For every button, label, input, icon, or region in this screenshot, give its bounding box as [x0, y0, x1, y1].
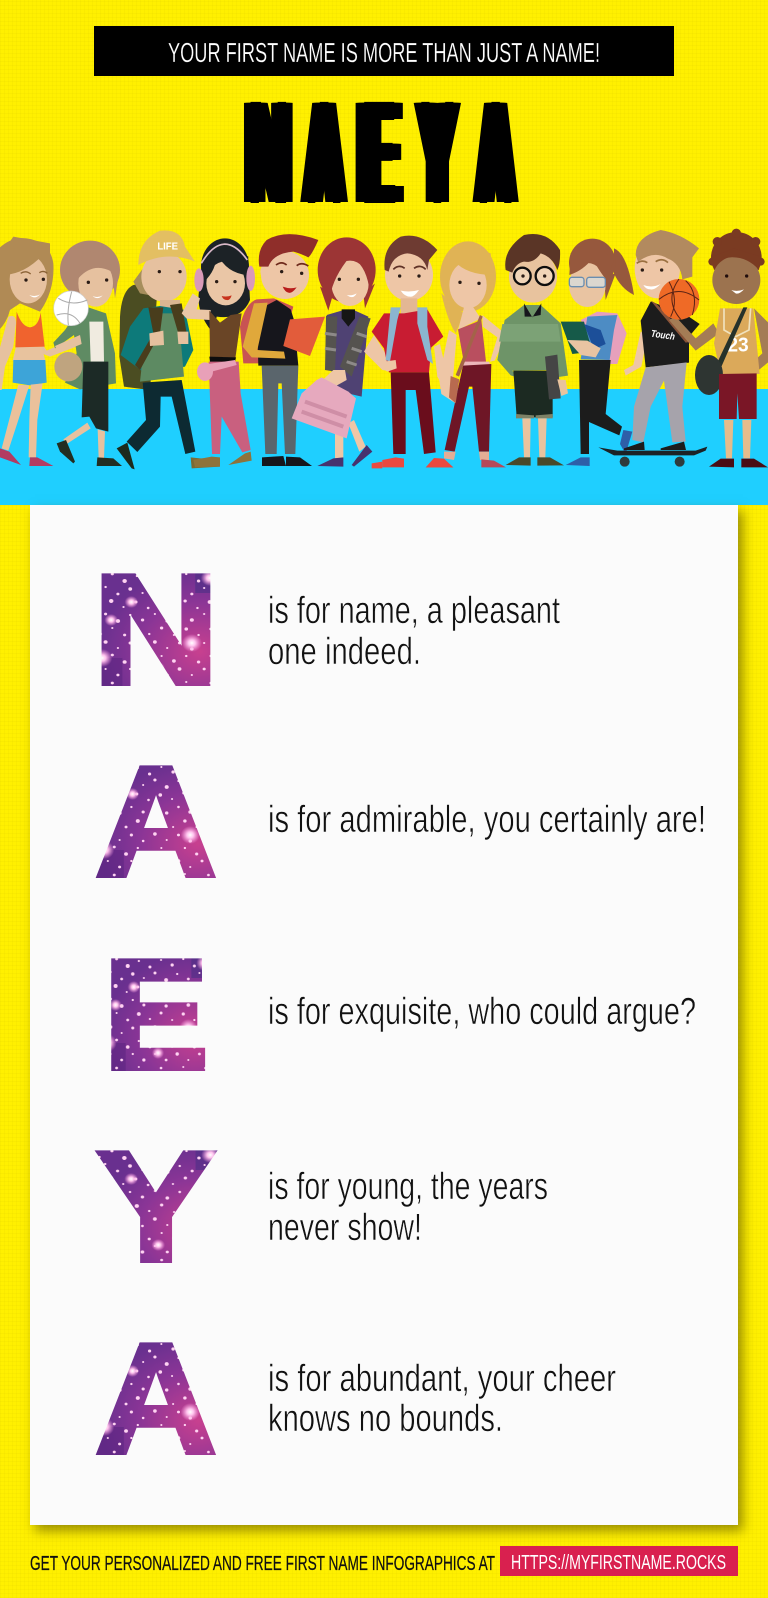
letter E: E	[104, 929, 208, 1102]
letter Y: Y	[98, 1120, 214, 1294]
person 2: girl with volleyball	[53, 241, 122, 466]
person 7: boy in red shirt	[364, 236, 453, 468]
text block: Y line: is for young, the years	[268, 1166, 548, 1208]
title: name	[244, 72, 519, 233]
left six people	[0, 230, 376, 469]
person 9: boy with glasses and laptop	[497, 234, 568, 466]
person 10: girl with glasses and tablet	[561, 239, 634, 466]
footer link badge	[500, 1546, 738, 1576]
crowd	[0, 229, 768, 469]
text block: Y line	[268, 1166, 548, 1249]
letter A: A	[96, 736, 216, 909]
text block: N line: is for name, a pleasant	[268, 590, 560, 632]
headline banner	[94, 26, 674, 76]
person 12: boy in yellow tank	[659, 229, 768, 467]
letter N: N	[93, 543, 219, 716]
floor band	[0, 389, 768, 505]
person 3: boy with cap and backpack	[117, 230, 220, 469]
title: name: Y	[421, 72, 454, 233]
person 11: boy on skateboard with basketball: Touch	[650, 329, 676, 343]
text block: N line	[268, 590, 560, 673]
person 12: boy in yellow tank: 23	[727, 334, 749, 357]
person 1: girl in orange top	[0, 237, 81, 466]
text block: N line: one indeed.	[268, 631, 421, 673]
illustration: group of twelve young people	[0, 228, 768, 470]
title: name: A	[307, 72, 341, 233]
panel: letters	[30, 505, 738, 1525]
person 8: blonde woman	[426, 241, 507, 467]
text block: second A line: is for abundant, your cheer	[268, 1358, 616, 1400]
person 6: girl with pink bag	[292, 237, 376, 467]
title: name: E	[361, 72, 397, 233]
text block: second A line: knows no bounds.	[268, 1398, 503, 1440]
right six people	[364, 229, 768, 468]
title: name: A	[479, 72, 512, 233]
letter A second: A	[96, 1313, 216, 1486]
person 4: girl with headphones	[182, 238, 255, 467]
text block: second A line	[268, 1358, 616, 1440]
person 5: boy with book	[240, 234, 325, 466]
person 11: boy on skateboard with basketball	[598, 230, 707, 467]
person 3: boy with cap and backpack: LIFE	[157, 241, 178, 252]
footer text: GET YOUR PERSONALIZED AND FREE FIRST NAME INFOGRAPHICS AT	[30, 1553, 495, 1575]
title: name: N	[247, 72, 290, 233]
text block: Y line: never show!	[268, 1207, 422, 1249]
